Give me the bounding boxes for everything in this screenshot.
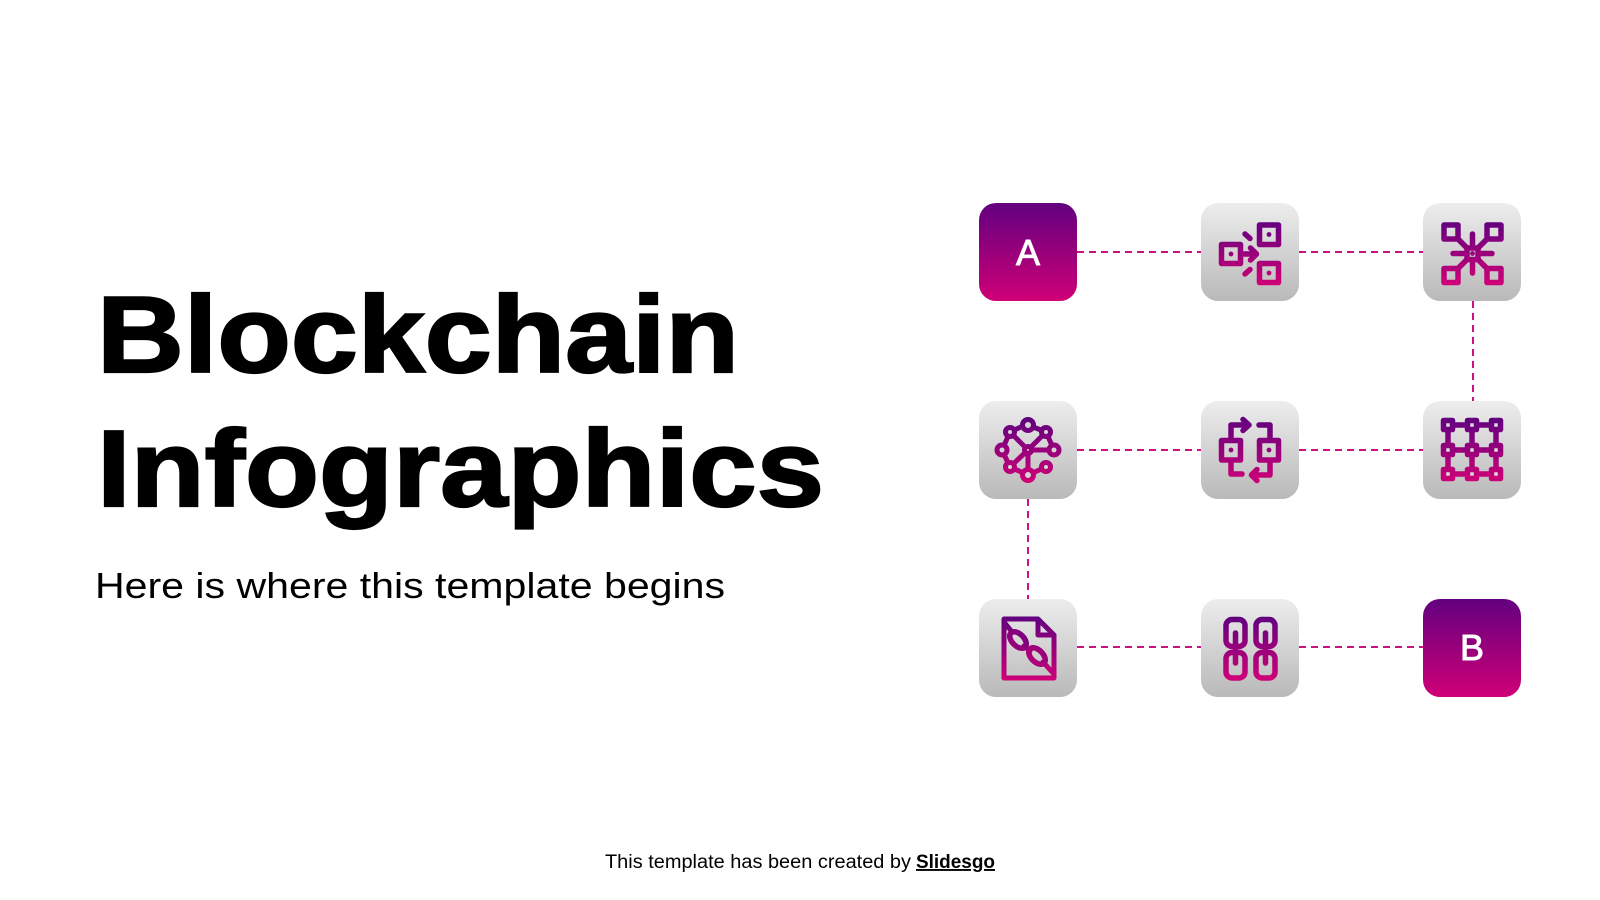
title: Infographics	[97, 408, 824, 530]
title	[97, 274, 824, 530]
icon: blocks splitting	[1201, 203, 1299, 301]
icon: chained document	[979, 599, 1077, 697]
node B	[1423, 599, 1521, 697]
icon: block exchange	[1201, 401, 1299, 499]
dashed connectors	[1028, 252, 1473, 647]
footer credit: This template has been created by	[605, 852, 912, 873]
icon: chain links	[1201, 599, 1299, 697]
subtitle: Here is where this template begins	[95, 565, 725, 606]
node B: B	[1460, 627, 1484, 668]
icon: neural network	[979, 401, 1077, 499]
icon: node grid	[1423, 401, 1521, 499]
title: Blockchain	[97, 274, 739, 396]
node A: A	[1016, 232, 1040, 273]
footer credit: Slidesgo	[916, 852, 995, 873]
node A	[979, 203, 1077, 301]
icon: network hub	[1423, 203, 1521, 301]
